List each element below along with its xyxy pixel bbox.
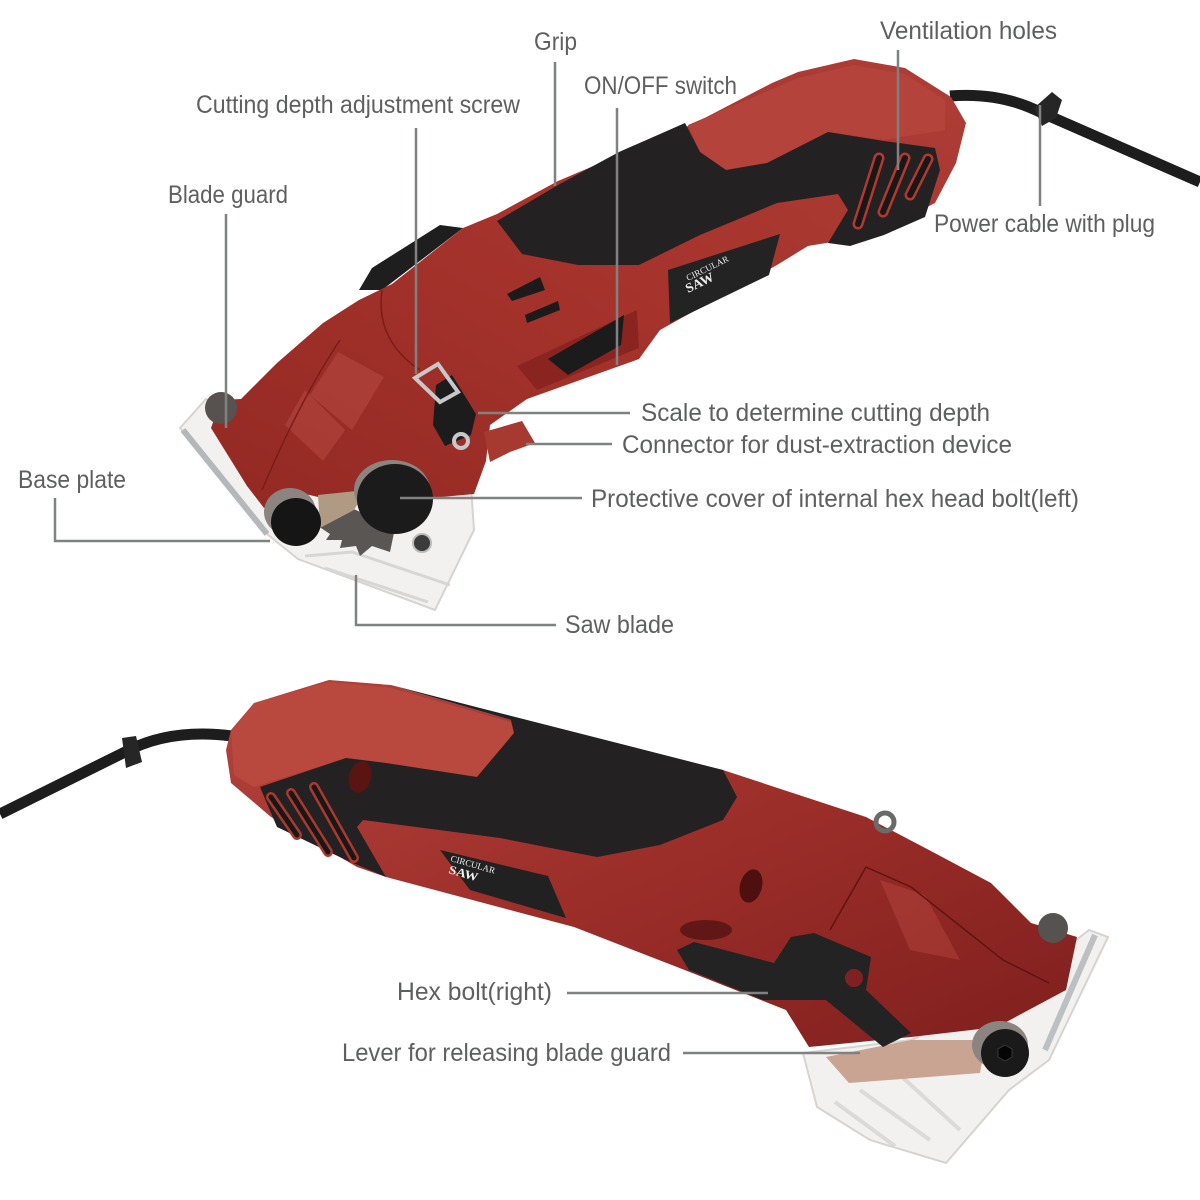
light handle panel top: [688, 65, 945, 170]
label: blade guard: Blade guard: [168, 181, 288, 209]
hex bolt cover left: [264, 488, 316, 536]
chrome edge top: [183, 430, 267, 534]
rating label top: [668, 234, 780, 323]
rating label bottom: CIRCULAR: [449, 853, 496, 876]
hole front: [736, 867, 766, 905]
small screw top: [413, 534, 431, 552]
plate inner detail bottom: [835, 1075, 960, 1146]
lever shadow: [680, 920, 732, 940]
nose ribs top: [285, 352, 384, 461]
housing seam top: [262, 290, 420, 490]
label: scale: Scale to determine cutting depth: [641, 399, 990, 427]
light handle panel bottom: [231, 682, 514, 787]
release lever: [677, 933, 911, 1047]
dust connector: [484, 421, 535, 462]
guard ring bottom: [1038, 913, 1068, 943]
cable grommet top: [1034, 92, 1062, 126]
depth adjustment screw: [433, 375, 476, 446]
top saw illustration: [180, 59, 1200, 610]
leader lines: [55, 50, 1040, 1053]
label: saw blade: Saw blade: [565, 611, 674, 639]
saw body bottom: [226, 680, 1077, 1047]
rating label bottom: [440, 850, 566, 918]
label: on/off switch: ON/OFF switch: [584, 72, 737, 100]
guard strap: [318, 490, 366, 528]
nose ribs bottom: [880, 880, 960, 960]
hole rear: [345, 759, 375, 795]
bottom saw illustration: [0, 680, 1108, 1163]
saw blade top: [318, 505, 395, 556]
on/off switch top: [517, 310, 639, 390]
power cable top: [950, 95, 1200, 182]
plate inner detail top: [305, 552, 450, 602]
label: base plate: Base plate: [18, 466, 126, 494]
rating label bottom: SAW: [447, 862, 480, 884]
base plate bottom: [803, 930, 1108, 1163]
label: cutting depth adjustment screw: Cutting depth adjustment screw: [196, 91, 521, 119]
chrome edge bottom: [1045, 935, 1095, 1050]
label: dust connector: Connector for dust-extraction device: [622, 431, 1012, 459]
label: lever: Lever for releasing blade guard: [342, 1039, 671, 1067]
label: grip: Grip: [534, 28, 577, 56]
screw bracket top: [415, 364, 458, 402]
hex bolt cover right: [354, 460, 430, 520]
lever hole: [845, 969, 863, 987]
label: power cable with plug: Power cable with plug: [934, 210, 1155, 238]
cable grommet bottom: [122, 736, 142, 768]
hex socket: [998, 1045, 1012, 1061]
label: ventilation holes: Ventilation holes: [880, 17, 1057, 45]
guard strap bottom: [826, 1040, 986, 1083]
base plate top: [180, 399, 474, 610]
guard ring top: [205, 392, 237, 424]
rating label top: SAW: [683, 269, 716, 296]
grip top: [497, 123, 940, 265]
top small ring bottom: [876, 813, 894, 831]
rating label top: CIRCULAR: [684, 254, 730, 283]
power cable bottom: [0, 734, 232, 814]
label: hex bolt right: Hex bolt(right): [397, 978, 552, 1006]
rear black bit: [359, 225, 463, 290]
body vents: [507, 277, 560, 323]
ventilation slots bottom: [271, 787, 354, 858]
label: protective cover: Protective cover of internal hex head bolt(left): [591, 485, 1079, 513]
saw body top: [211, 59, 966, 508]
ventilation slots top: [858, 158, 928, 224]
grip bottom: [260, 685, 737, 877]
housing seam bottom: [830, 867, 1049, 983]
hex bolt right guard: [972, 1021, 1028, 1069]
